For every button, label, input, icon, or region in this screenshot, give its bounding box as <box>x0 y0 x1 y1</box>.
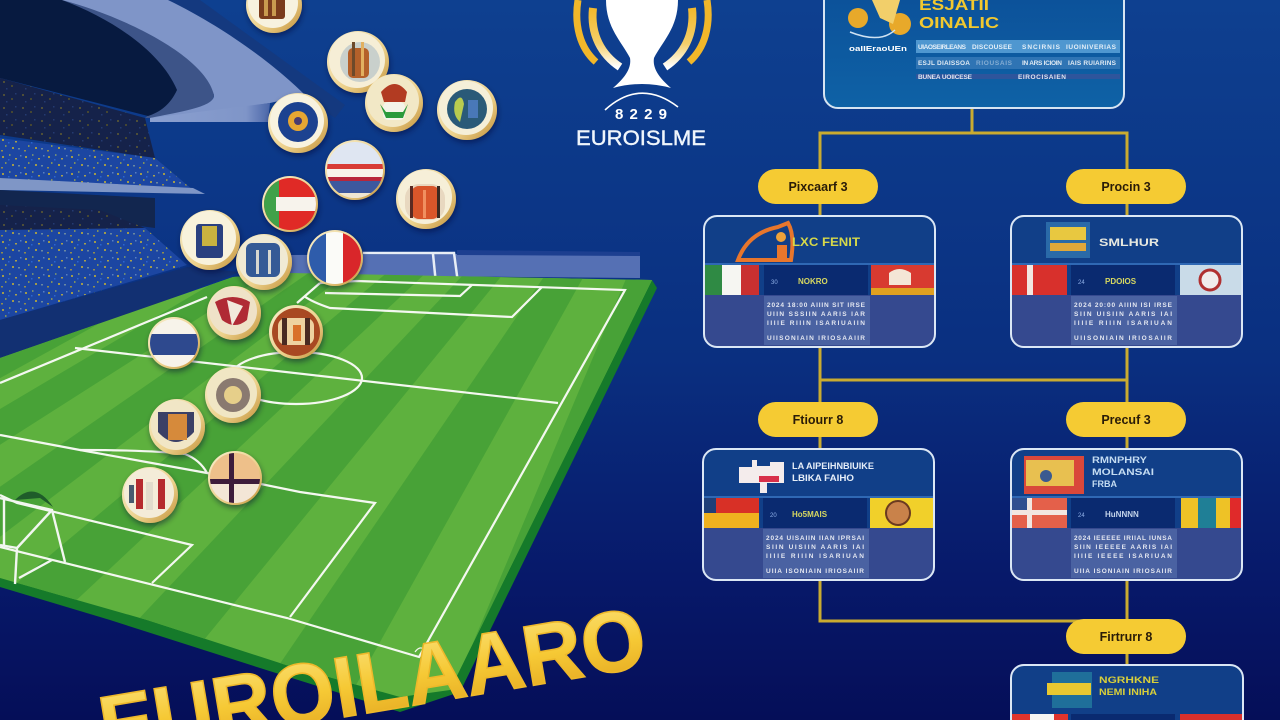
match card 3: 2024 UISAIIN IIAN IPRSAI <box>766 535 864 542</box>
far wall and goal <box>290 250 640 284</box>
badge 9 <box>180 210 240 270</box>
card emblem <box>1046 222 1090 258</box>
top card fixture table: UIAOSEIRLEANS <box>918 44 967 51</box>
card title: SMLHUR <box>1099 237 1159 249</box>
stadium <box>0 0 345 360</box>
top card fixture table: ESJL DIAISSOA <box>918 60 970 67</box>
match card 1: IIIIE RIIIN ISARIUAIIN <box>767 320 865 327</box>
badge 11 flag of France <box>307 230 363 286</box>
pill: Procin 3 <box>1101 180 1151 194</box>
pill: Pixcaarf 3 <box>788 180 848 194</box>
badge 8 flag <box>262 176 320 232</box>
match card 2: 24 <box>1078 280 1085 286</box>
top card title: OINALIC <box>919 15 1000 32</box>
card title <box>1092 455 1154 490</box>
badge 4 <box>437 80 497 140</box>
match card 4: SIIN IEEEEE AARIS IAI <box>1074 544 1172 551</box>
match card 3: 20 <box>770 513 777 519</box>
badge 2 <box>327 31 389 93</box>
card emblem <box>739 460 784 493</box>
badge 15 <box>205 367 261 423</box>
match card 3: Ho5MAIS <box>792 510 828 519</box>
top card emblem <box>848 0 911 38</box>
badge 16 <box>149 399 205 455</box>
badge 6 <box>325 140 385 201</box>
match card 4: IIIIE IEEEE ISARIUAN <box>1074 553 1172 560</box>
badge 5 <box>268 93 328 153</box>
top card fixture table: EIROCISAIEN <box>1018 74 1066 81</box>
match card 2: IIIIE RIIIN ISARIUAN <box>1074 320 1172 327</box>
match card 4: 2024 IEEEEE IRIIAL IUNSA <box>1074 535 1172 542</box>
top card fixture table <box>916 40 1120 81</box>
card title <box>792 461 874 484</box>
match card 3: UIIA ISONIAIN IRIOSAIIR <box>766 568 864 575</box>
card title: NEMI INIHA <box>1099 687 1157 698</box>
pill <box>1066 619 1186 654</box>
pill <box>758 402 878 437</box>
top card fixture table: IN ARS ICIOIN <box>1022 60 1062 67</box>
top card fixture table: RIOUSAIS <box>976 60 1013 67</box>
logo year arc <box>605 93 678 110</box>
match card 4: HuNNNN <box>1105 510 1139 519</box>
badge 14 <box>148 317 200 369</box>
match card 2: 2024 20:00 AIIIN ISI IRSE <box>1074 302 1173 309</box>
pill <box>758 169 878 204</box>
match card 1: 30 <box>771 280 778 286</box>
match card 4: 24 <box>1078 513 1085 519</box>
match card 4 <box>1010 448 1243 581</box>
card title: LBIKA FAIHO <box>792 473 854 484</box>
pill: Precuf 3 <box>1101 413 1151 427</box>
pitch lines <box>0 281 625 657</box>
card title: LA AIPEIHNBIUIKE <box>792 461 874 472</box>
card title: FRBA <box>1092 479 1117 490</box>
card emblem <box>1047 672 1092 708</box>
match card 1: UIIN SSSIIN AARIS IAR <box>767 311 865 318</box>
card title: NGRHKNE <box>1099 675 1159 686</box>
badge 12 <box>207 286 261 340</box>
top card <box>824 0 1124 108</box>
pitch <box>0 273 657 712</box>
top card fixture table: DISCOUSEE <box>972 44 1013 51</box>
card title: MOLANSAI <box>1092 467 1154 478</box>
logo wordmark: EUROISLME <box>576 127 706 150</box>
match card 2: UIISONIAIN IRIOSAIIR <box>1074 335 1172 342</box>
match card 1: 2024 18:00 AIIIN SIT IRSE <box>767 302 866 309</box>
top card title <box>919 0 1000 32</box>
trophy cup <box>606 0 678 88</box>
trophy logo: 8 2 2 9 <box>615 106 667 123</box>
pill: Firtrurr 8 <box>1100 630 1152 644</box>
match card 1: UIISONIAIN IRIOSAAIIR <box>767 335 865 342</box>
badge 1 <box>246 0 302 33</box>
badge 7 <box>396 169 456 229</box>
card emblem <box>1024 456 1084 494</box>
top card caption: oaIIEraoUEn <box>849 44 908 53</box>
gold arcs <box>577 0 708 67</box>
match card 2: SIIN UISIIN AARIS IAI <box>1074 311 1172 318</box>
pill: Ftiourr 8 <box>793 413 843 427</box>
match card 3: IIIIE RIIIN ISARIUAN <box>766 553 864 560</box>
badge 3 <box>365 74 423 132</box>
top card fixture table: IUOINIVERIAS <box>1066 44 1117 51</box>
near goal <box>0 491 65 584</box>
stage pills <box>758 169 1186 654</box>
top card fixture table: IAIS RUIARINS <box>1068 60 1117 67</box>
match card 2: PDOIOS <box>1105 277 1137 286</box>
card title: RMNPHRY <box>1092 455 1148 466</box>
match card 3: SIIN UISIIN AARIS IAI <box>766 544 864 551</box>
trophy logo <box>576 0 708 150</box>
badge 17 <box>208 451 262 505</box>
match card 1: NOKRO <box>798 277 828 286</box>
top card fixture table: SNCIRNIS <box>1022 44 1061 51</box>
match card 1 <box>703 215 936 348</box>
pill <box>1066 169 1186 204</box>
bracket connectors <box>820 108 1127 665</box>
badge 13 <box>269 305 323 359</box>
badge 18 <box>122 467 178 523</box>
match card 4: UIIA ISONIAIN IRIOSAIIR <box>1074 568 1172 575</box>
match card 3 <box>702 448 935 581</box>
match card 5 <box>1011 665 1243 720</box>
match card 2 <box>1010 215 1243 348</box>
pill <box>1066 402 1186 437</box>
card flags <box>1012 714 1242 720</box>
card title <box>1099 675 1159 698</box>
card emblem <box>738 223 792 260</box>
top card fixture table: BUNEA UOIICESE <box>918 74 973 81</box>
badge 10 <box>236 234 292 290</box>
team badges <box>122 0 497 523</box>
card title: LXC FENIT <box>792 235 861 249</box>
